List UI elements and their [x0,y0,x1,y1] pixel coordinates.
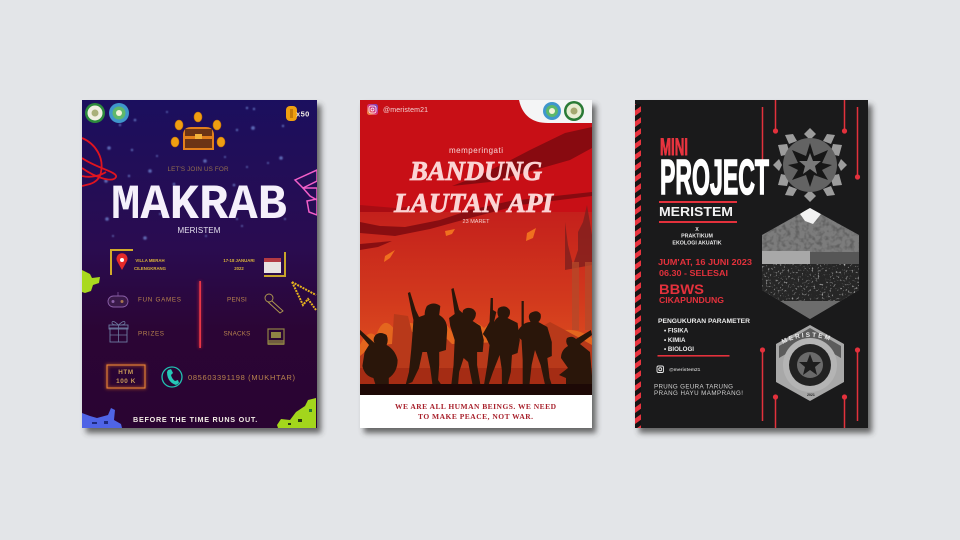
icon: Meristem badge [776,325,844,401]
location block [111,250,167,275]
heading: MERISTEM with rules: MERISTEM [659,205,733,219]
location block: VILLA MERAH [135,258,165,263]
text: parameter list: • FISIKA [664,328,689,334]
soldier three [449,288,484,385]
divider: neon red line [198,281,202,348]
text: parameter list: • KIMIA [664,337,686,344]
icon: Meristem badge: MERISTEM [781,332,830,344]
soldier kneeling right [559,330,592,385]
text: date: 23 MARET [463,219,490,225]
icon: green space invader left [82,270,100,293]
location block: CILENGKRANG [134,266,167,271]
text: peace message [395,402,557,421]
heading: MERISTEM with rules [659,201,737,223]
text: slogan [654,384,743,397]
feature: fun games: FUN GAMES [138,296,181,304]
feature: pensi [227,294,283,313]
title: Bandung Lautan Api: LAUTAN API [393,188,554,218]
icon: logo pair [85,103,129,123]
feature: fun games [108,292,181,307]
text: slogan: PRANG HAYU MAMPRANG! [654,390,743,397]
feature: snacks [223,329,284,345]
tagline: BEFORE THE TIME RUNS OUT. [133,415,258,424]
date block: 17-18 JANUARI [223,258,255,263]
text: slogan: PRUNG GEURA TARUNG [654,384,733,390]
text: location [659,281,724,305]
text: parameter list: • BIOLOGI [664,346,694,353]
icon: logo pair [543,101,584,121]
feature: prizes: PRIZES [138,330,164,338]
icon: pink hourglass [295,170,317,215]
soldier kneeling left [358,329,398,385]
icon: Meristem badge: 2021 [807,393,815,397]
title: MAKRAB: MAKRAB [111,177,287,233]
text: location: CIKAPUNDUNG [659,296,724,305]
text: schedule [658,258,753,278]
icon: grey star mandala [773,128,847,202]
text: schedule: JUM'AT, 16 JUNI 2023 [658,258,753,267]
text: peace message: WE ARE ALL HUMAN BEINGS. WE NEED [395,402,557,411]
scene: ground [360,384,592,396]
text: instagram handle: @meristem21 [383,107,428,114]
corner: white logo tab [519,100,592,123]
photo: group portrait hexagon [760,206,862,321]
decoration: red pin lines [760,100,860,428]
text: let's join us for: LET'S JOIN US FOR [168,166,229,173]
scene: ruined city [360,314,592,368]
date block [223,252,285,276]
title: Bandung Lautan Api: BANDUNG [409,156,542,186]
date block: 2022 [234,266,244,271]
decoration: ruined tower [565,205,592,270]
icon: instagram [367,104,378,115]
text: location: BBWS [659,281,704,297]
icon: green space invader right [277,398,316,428]
poster: Mini Project: PROJECT [660,151,769,205]
icon: coin counter [286,106,310,121]
price box: HTM 100 K: HTM [118,369,134,376]
feature: snacks: SNACKS [223,330,251,338]
text: parameter list: PENGUKURAN PARAMETER [658,318,751,325]
feature: pensi: PENSI [227,296,247,304]
icon: coin counter: x50 [296,110,310,118]
poster: Bandung Lautan Api [358,100,596,433]
icon: yellow pixel cursor [292,282,316,310]
title: Bandung Lautan Api [393,156,554,218]
soldier five [517,301,552,385]
scene: soldier silhouettes [358,288,592,385]
contact: phone: 085603391198 (MUKHTAR) [188,373,296,382]
icon: instagram outline [657,366,664,372]
background: fire gradient [360,212,592,345]
icon: blue space invader [82,408,122,428]
price box: HTM 100 K [107,365,145,388]
price box: HTM 100 K: 100 K [116,378,136,385]
text: schedule: 06.30 - SELESAI [659,269,728,278]
text: collaboration [672,227,722,246]
soldier four [483,298,520,385]
heading: MINI: MINI [660,134,688,161]
text: parameter list [658,318,751,353]
text: collaboration: X [695,227,699,233]
text: MERISTEM: MERISTEM [177,226,221,235]
icon: red ringed planet [82,138,116,186]
scene: flames [360,322,592,356]
decoration: hazard stripe [635,104,641,428]
soldier two [406,292,447,385]
text: handle: @meristem21 [669,367,701,373]
feature: prizes [109,321,164,342]
text: collaboration: EKOLOGI AKUATIK [672,240,722,246]
text: peace message: TO MAKE PEACE, NOT WAR. [418,412,533,421]
divider rule [658,355,730,357]
text: memperingati: memperingati [449,146,503,155]
icon: treasure chest and coins [171,112,225,150]
poster: Makrab [82,100,321,433]
text: collaboration: PRAKTIKUM [681,234,713,240]
contact: phone [162,367,296,387]
decoration: ember sparks [384,228,536,262]
panel: white footer [360,395,592,428]
decoration: dark brush strokes [360,127,592,250]
poster: Mini Project [635,100,876,437]
